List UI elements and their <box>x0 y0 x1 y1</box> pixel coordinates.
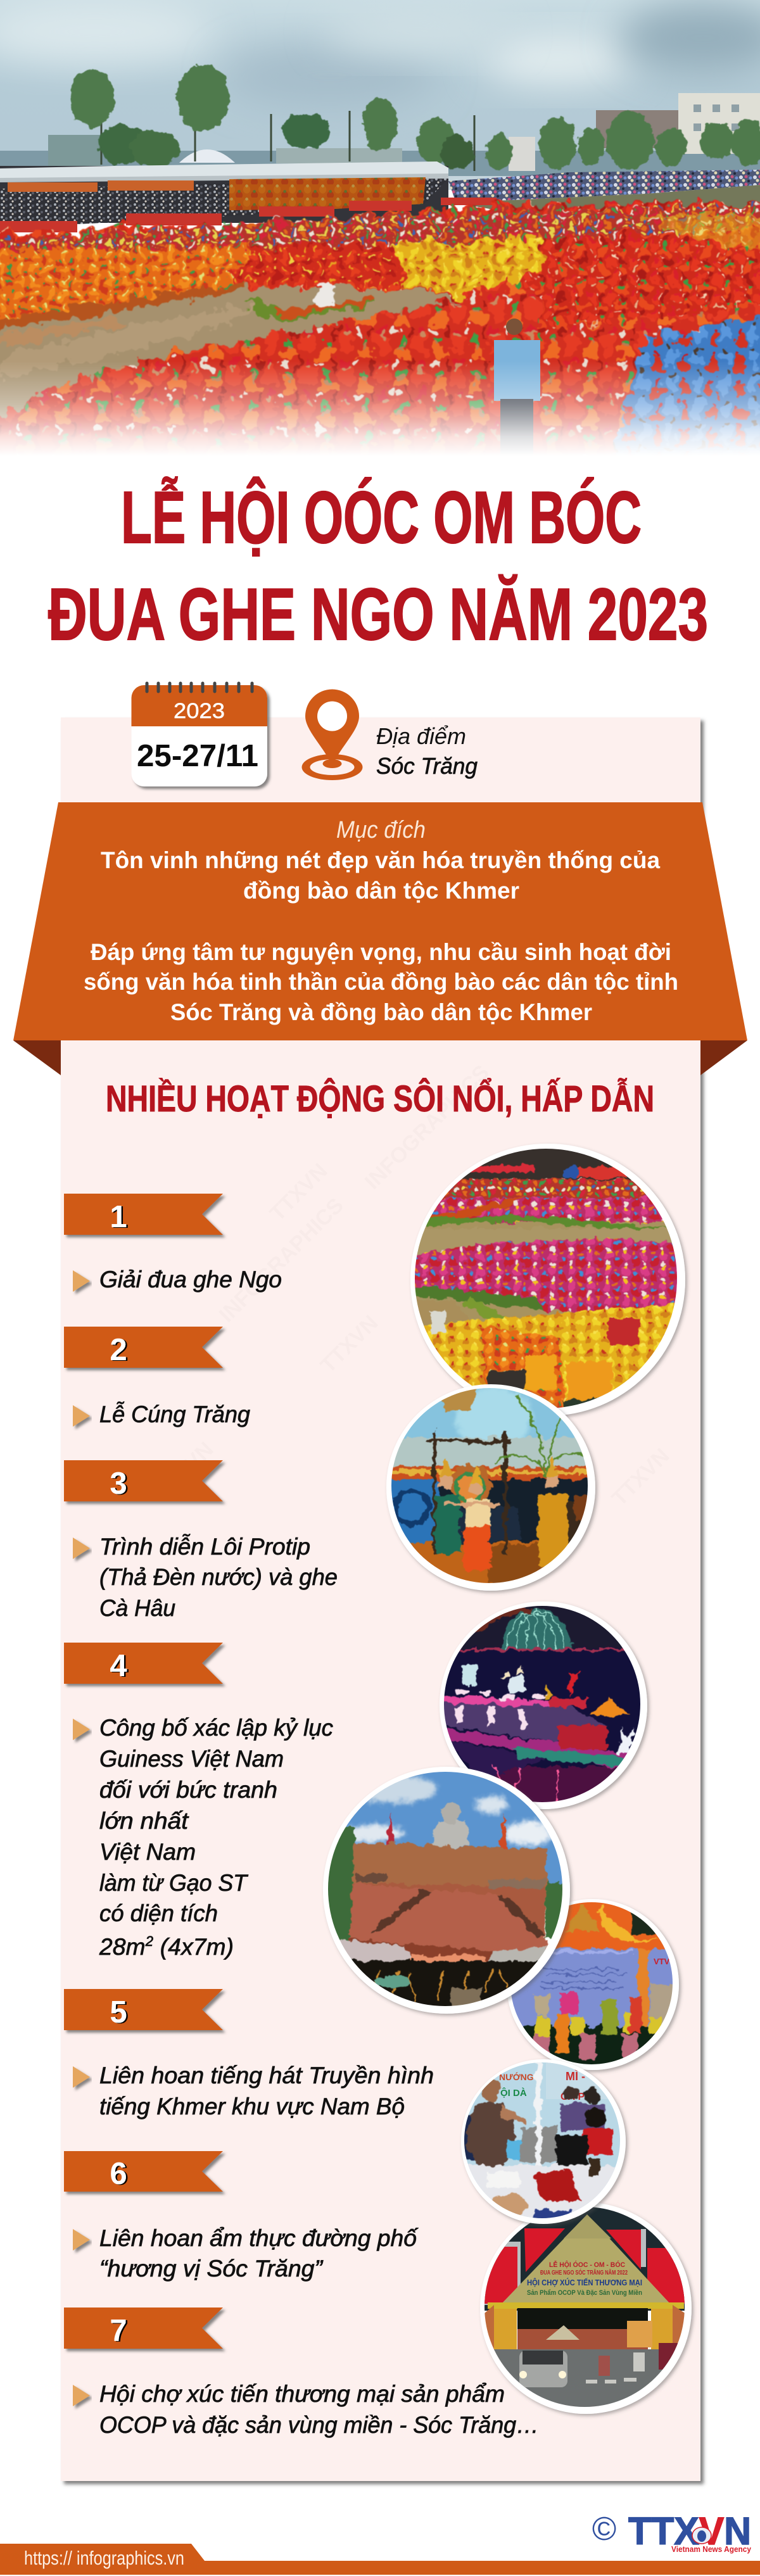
item 4 text: Việt Nam <box>99 1839 196 1865</box>
footer bar <box>0 2544 760 2575</box>
photo 7: OCOP trade fair gate: ĐUA GHE NGO SÓC TRĂNG NĂM 2022 <box>540 2268 628 2276</box>
location text: Địa điểm <box>376 723 466 749</box>
item 4 text: lớn nhất <box>99 1808 189 1834</box>
item 6 text <box>73 2225 419 2282</box>
ribbon 3: 3 <box>110 1467 127 1501</box>
icon: location pin <box>301 689 362 780</box>
location text <box>376 723 478 779</box>
ribbon 1 <box>64 1194 223 1235</box>
item 5 text <box>73 2062 434 2119</box>
photo 6: street food festival: NƯỚNG <box>499 2071 534 2082</box>
watermarks: INFOGRAPHICS <box>215 1193 348 1327</box>
banner: purpose: sống văn hóa tinh thần của đồng bào các dân tộc tỉnh <box>84 969 678 995</box>
item 3 text: (Thả Đèn nước) và ghe <box>99 1564 338 1590</box>
ribbon 7: 7 <box>110 2314 127 2348</box>
photo 6: street food festival <box>455 2059 632 2232</box>
logo: TTXVN: Vietnam News Agency <box>671 2544 752 2554</box>
title <box>48 476 708 655</box>
location text: Sóc Trăng <box>376 753 478 779</box>
item 6 text: “hương vị Sóc Trăng” <box>99 2256 324 2282</box>
ribbon 5 <box>64 1989 223 2030</box>
ribbon 2 <box>64 1327 223 1368</box>
item 4 text: Công bố xác lập kỷ lục <box>99 1715 333 1741</box>
banner: purpose <box>13 802 747 1040</box>
ribbon 7 <box>64 2308 223 2349</box>
photo 4: rice painting Guinness record <box>317 1760 576 2018</box>
banner: purpose: Đáp ứng tâm tư nguyện vọng, nhu cầu sinh hoạt đời <box>91 939 671 965</box>
ribbon 3 <box>64 1460 223 1501</box>
photo 5: Khmer song festival stage: VTV <box>654 1957 670 1966</box>
item 4 text: làm từ Gạo ST <box>99 1870 248 1896</box>
item 4 text: (4x7m) <box>153 1934 234 1960</box>
item 7 text: OCOP và đặc sản vùng miền - Sóc Trăng… <box>99 2412 539 2438</box>
ribbon 5: 5 <box>110 1995 127 2030</box>
logo: TTXVN: TTXVN <box>628 2510 751 2553</box>
photo 5: Khmer song festival stage <box>500 1893 685 2078</box>
photo 7: OCOP trade fair gate: LỄ HỘI ÓOC - OM - BÓC <box>549 2261 625 2269</box>
photo 2: Khmer dancers <box>380 1378 602 1593</box>
item 4 text: 2 <box>145 1933 153 1949</box>
item 3 text: Cà Hâu <box>99 1595 175 1621</box>
photo 1: boat race <box>410 1144 689 1418</box>
ribbon 2: 2 <box>110 1333 127 1367</box>
item 6 text: Liên hoan ẩm thực đường phố <box>99 2225 419 2251</box>
photo 3: illuminated boat at night <box>433 1596 654 1817</box>
banner: purpose: Tôn vinh những nét đẹp văn hóa truyền thống của <box>101 847 660 873</box>
photo 6: street food festival: CÀ PH <box>560 2090 592 2102</box>
watermarks: TTXVN <box>151 1437 218 1505</box>
icon: calendar <box>132 683 267 786</box>
ribbon 1: 1 <box>110 1200 127 1234</box>
ribbon 6 <box>64 2151 223 2192</box>
photo 6: street food festival: MÌ - <box>566 2069 585 2083</box>
item 4 text: có diện tích <box>99 1900 218 1926</box>
item 4 text: Guiness Việt Nam <box>99 1746 284 1772</box>
main panel background <box>61 717 700 2481</box>
item 5 text: tiếng Khmer khu vực Nam Bộ <box>99 2093 405 2119</box>
hero photo: boat crowd on the river <box>0 0 760 469</box>
item 4 text <box>73 1715 333 1960</box>
photo 6: street food festival: ỘI DÀ <box>500 2087 527 2099</box>
item 2 text: Lễ Cúng Trăng <box>99 1401 250 1427</box>
ribbon 6: 6 <box>110 2157 127 2191</box>
icon: calendar: 25-27/11 <box>137 739 258 773</box>
photo 7: OCOP trade fair gate <box>479 2202 692 2416</box>
footer bar: https:// infographics.vn <box>24 2547 184 2569</box>
item 5 text: Liên hoan tiếng hát Truyền hình <box>99 2062 434 2088</box>
ribbon 4 <box>64 1643 223 1684</box>
item 3 text <box>73 1534 338 1621</box>
banner: purpose: Mục đích <box>336 817 426 843</box>
logo: TTXVN: © <box>592 2511 616 2548</box>
item 1 text: Giải đua ghe Ngo <box>99 1266 282 1292</box>
banner: purpose: Sóc Trăng và đồng bào dân tộc Khmer <box>170 999 592 1025</box>
watermarks <box>151 1060 674 1511</box>
watermarks: TTXVN <box>316 1311 383 1378</box>
item 7 text: Hội chợ xúc tiến thương mại sản phẩm <box>99 2381 505 2407</box>
photo 7: OCOP trade fair gate: HỘI CHỢ XÚC TIẾN THƯƠNG MẠI <box>527 2278 642 2287</box>
watermarks: TTXVN <box>607 1444 674 1511</box>
watermarks: INFOGRAPHICS <box>360 1060 494 1194</box>
item 4 text: đối với bức tranh <box>99 1777 277 1803</box>
icon: calendar: 2023 <box>174 699 225 723</box>
ribbon 4: 4 <box>110 1649 127 1683</box>
photo 7: OCOP trade fair gate: Sản Phẩm OCOP Và Đặc Sản Vùng Miền <box>527 2289 642 2297</box>
banner folds <box>13 1040 747 1075</box>
item 7 text <box>73 2381 539 2438</box>
banner: purpose: đồng bào dân tộc Khmer <box>243 878 519 904</box>
watermarks: TTXVN <box>265 1159 332 1226</box>
item 4 text: 28m <box>99 1934 145 1960</box>
item 3 text: Trình diễn Lôi Protip <box>99 1534 310 1560</box>
